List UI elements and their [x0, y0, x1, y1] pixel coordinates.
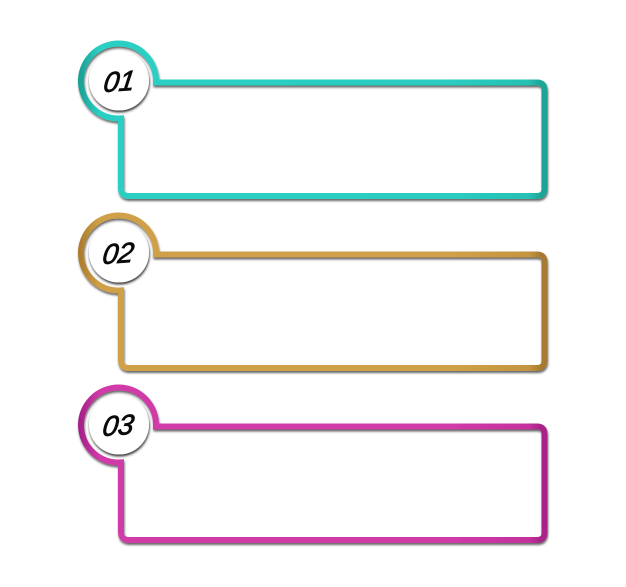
number badge: [89, 394, 149, 454]
number 01: 01: [102, 64, 137, 98]
panel 01: teal frame: [81, 43, 545, 196]
panel 03: magenta frame: [81, 387, 545, 540]
frame outline: [81, 387, 545, 540]
panel 02: gold frame: [81, 215, 545, 368]
number 02: 02: [101, 236, 136, 270]
frame outline: [81, 215, 545, 368]
number badge: [89, 50, 149, 110]
number 03: 03: [101, 408, 136, 442]
number badge: [89, 222, 149, 282]
frame outline: [81, 43, 545, 196]
